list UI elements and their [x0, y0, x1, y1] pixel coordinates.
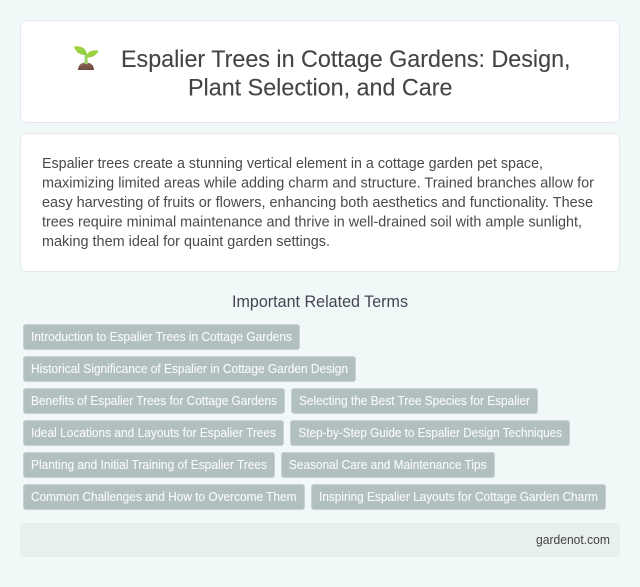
tag: step-by-step guide: Step-by-Step Guide to Espalier Design Techniques: [298, 425, 562, 440]
tag: historical significance: [24, 356, 356, 382]
tag: inspiring layouts: [312, 484, 606, 510]
related terms tags: [24, 324, 606, 510]
tag: benefits: [24, 388, 284, 414]
tag: benefits: Benefits of Espalier Trees for Cottage Gardens: [31, 393, 277, 408]
footer text: gardenot.com: [536, 532, 610, 547]
title: Espalier Trees in Cottage Gardens: Design,: [121, 46, 570, 73]
tag: step-by-step guide: [290, 420, 570, 446]
tag: ideal locations: Ideal Locations and Layouts for Espalier Trees: [31, 425, 276, 440]
tag: planting and training: Planting and Initial Training of Espalier Trees: [31, 457, 267, 472]
tag: inspiring layouts: Inspiring Espalier Layouts for Cottage Garden Charm: [319, 489, 598, 504]
tag: seasonal care: [282, 452, 494, 478]
tag: seasonal care: Seasonal Care and Maintenance Tips: [289, 457, 486, 472]
paragraph text: [42, 156, 594, 250]
heading: related terms: Important Related Terms: [232, 292, 408, 311]
footer: [20, 523, 620, 557]
tag: selecting species: Selecting the Best Tree Species for Espalier: [299, 393, 531, 408]
tag: ideal locations: [24, 420, 284, 446]
tag: historical significance: Historical Significance of Espalier in Cottage Garden Design: [31, 361, 348, 376]
paragraph text: easy harvesting of fruits or flowers, enhancing both aesthetics and functionality. These: [42, 195, 593, 211]
tag: introduction: Introduction to Espalier Trees in Cottage Gardens: [31, 329, 292, 344]
paragraph text: maximizing limited areas while adding charm and structure. Trained branches allow for: [42, 176, 594, 192]
tag: introduction: [24, 324, 300, 350]
tag: selecting species: [292, 388, 538, 414]
icon: sprout: [74, 46, 98, 70]
title: Plant Selection, and Care: [188, 74, 452, 102]
tag: planting and training: [24, 452, 274, 478]
tag: common challenges: [24, 484, 304, 510]
paragraph text: making them ideal for quaint garden settings.: [42, 234, 330, 250]
paragraph text: trees require minimal maintenance and thrive in well-drained soil with ample sunlight,: [42, 214, 582, 230]
paragraph text: Espalier trees create a stunning vertical element in a cottage garden pet space,: [42, 156, 543, 172]
tag: common challenges: Common Challenges and How to Overcome Them: [31, 489, 296, 504]
title: [121, 46, 570, 102]
panel: title card: [20, 20, 620, 122]
panel: intro paragraph: [20, 134, 620, 272]
